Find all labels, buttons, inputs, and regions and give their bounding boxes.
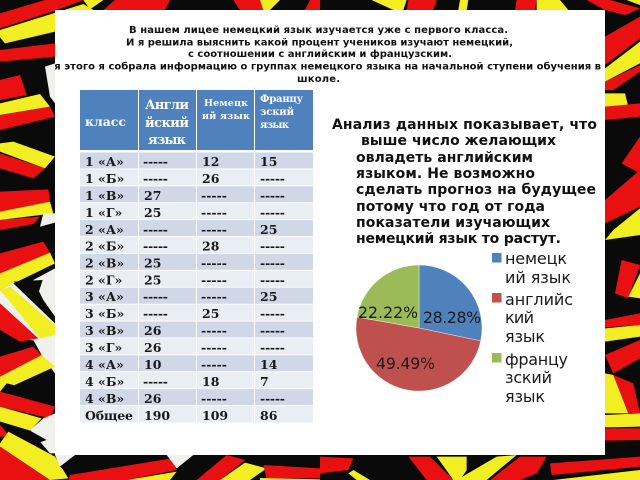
table row 3 «А»: 25 <box>260 289 277 304</box>
table header row <box>80 90 313 150</box>
panel: white content sheet <box>55 10 605 455</box>
table header row: класс <box>85 114 126 129</box>
pie slice: французский язык <box>357 265 419 328</box>
table row 1 «Г»: 1 «Г» <box>85 205 122 220</box>
title text block: Для этого я собрала информацию о группах немецкого языка на начальной ступени обучения в <box>38 60 601 72</box>
legend item: французский язык: язык <box>505 387 545 406</box>
table row 2 «В»: 25 <box>144 256 161 270</box>
table row 4 «А»: 14 <box>260 357 278 372</box>
table row 3 «Б»: ----- <box>143 306 168 321</box>
table row 3 «Г»: ----- <box>201 340 227 355</box>
table row 3 «Б»: 25 <box>202 306 219 321</box>
table row 2 «Б»: 28 <box>202 238 220 254</box>
table row 1 «Б»: 1 «Б» <box>85 171 124 186</box>
analysis text block: овладеть английским <box>356 150 533 166</box>
table row 1 «Б»: ----- <box>260 171 285 186</box>
table header row: Францу <box>260 94 304 105</box>
table row 1 «Г»: ----- <box>201 205 227 220</box>
table row 3 «В»: ----- <box>260 323 285 338</box>
table header row: язык <box>148 133 187 148</box>
table row 1 «Б» <box>80 169 313 186</box>
title text block: с соотношении с английским и французским. <box>188 48 452 60</box>
pie slice: английский язык <box>356 317 481 391</box>
table row 4 «А»: ----- <box>201 357 227 372</box>
table row 2 «А»: 25 <box>260 222 277 237</box>
pie label 49.49%: 49.49% <box>376 354 435 373</box>
pie label 22.22%: 22.22% <box>358 303 418 322</box>
table row 3 «Б»: 3 «Б» <box>85 306 124 321</box>
table row 4 «В»: 4 «В» <box>85 391 124 406</box>
analysis text block: языком. Не возможно <box>356 166 535 182</box>
pie chart: language shares <box>356 265 482 391</box>
table row 2 «А» <box>80 220 313 237</box>
table header row: Англи <box>145 98 189 113</box>
table row 4 «А»: 4 «А» <box>85 357 124 372</box>
table row 2 «Б»: 2 «Б» <box>85 238 124 254</box>
table row 3 «А»: 3 «А» <box>85 289 124 304</box>
table row 1 «Г»: ----- <box>260 205 285 220</box>
legend item: английский язык <box>492 290 573 346</box>
table row 1 «Г» <box>80 203 313 220</box>
table row 1 «А»: 15 <box>260 154 277 169</box>
table row 3 «Г»: 26 <box>144 340 162 355</box>
table row 3 «А» <box>80 288 313 304</box>
table header row: Немецк <box>204 98 248 109</box>
chart legend <box>492 249 573 406</box>
table row 2 «Г»: ----- <box>260 272 285 288</box>
table row 4 «В»: ----- <box>260 391 285 406</box>
table row 1 «В»: ----- <box>260 188 285 203</box>
analysis text block <box>332 117 597 247</box>
title text block: школе. <box>297 74 340 85</box>
legend item: английский язык: английс <box>505 290 573 309</box>
table row 2 «А»: ----- <box>143 222 168 237</box>
legend item: английский язык: кий <box>505 308 534 327</box>
legend item: французский язык: францу <box>505 350 568 369</box>
table row 4 «В»: 26 <box>144 391 162 406</box>
table row total: Общее <box>85 408 133 423</box>
table row 1 «В» <box>80 186 313 203</box>
table row 4 «В»: ----- <box>201 391 227 406</box>
table row 4 «А»: 10 <box>144 357 162 372</box>
table row total: 86 <box>260 408 278 423</box>
analysis text block: показатели изучающих <box>356 215 550 231</box>
table row 4 «Б»: ----- <box>143 374 168 389</box>
table row 4 «Б»: 4 «Б» <box>85 374 124 389</box>
table row 2 «В»: ----- <box>260 256 285 270</box>
table row 3 «А»: ----- <box>201 289 227 304</box>
table row 2 «В» <box>80 254 313 270</box>
table row 2 «В»: ----- <box>201 256 227 270</box>
legend item: французский язык <box>492 350 568 406</box>
table row 2 «А»: 2 «А» <box>85 222 124 237</box>
table row 2 «Б»: ----- <box>143 238 168 254</box>
table row 4 «Б» <box>80 372 313 389</box>
table row 3 «Г»: 3 «Г» <box>85 340 122 355</box>
table row 2 «Б»: ----- <box>260 238 285 254</box>
table row 4 «А» <box>80 355 313 372</box>
title text block: И я решила выяснить какой процент учеников изучают немецкий, <box>126 38 513 48</box>
analysis text block: сделать прогноз на будущее <box>356 182 596 198</box>
table row 1 «А»: 1 «А» <box>85 154 124 169</box>
table header row: зский <box>260 107 295 118</box>
table row 3 «В»: 26 <box>144 323 162 338</box>
table row 3 «В»: ----- <box>201 323 227 338</box>
table header row: йский <box>145 116 189 131</box>
table row 3 «В»: 3 «В» <box>85 323 124 338</box>
table row 4 «Б»: 18 <box>202 374 220 389</box>
legend item: немецкий язык: немецк <box>505 249 567 268</box>
table row 3 «Г» <box>80 338 313 355</box>
table row 1 «Б»: ----- <box>143 171 168 186</box>
legend item: немецкий язык: ий язык <box>505 268 571 287</box>
table row 1 «В»: 27 <box>144 188 161 203</box>
table row 2 «А»: ----- <box>201 222 227 237</box>
legend item: французский язык: зский <box>505 368 552 387</box>
table row 1 «В»: 1 «В» <box>85 188 124 203</box>
table row 1 «А»: 12 <box>202 154 219 169</box>
table row total: 190 <box>144 408 170 423</box>
legend item: английский язык: язык <box>505 327 545 346</box>
pie label 28.28%: 28.28% <box>423 308 481 327</box>
table: language groups by class <box>80 90 313 423</box>
table row 3 «Г»: ----- <box>260 340 285 355</box>
table row 2 «Г» <box>80 271 313 288</box>
analysis text block: потому что год от года <box>356 199 545 215</box>
table row total <box>80 406 313 423</box>
table row 3 «Б»: ----- <box>260 306 285 321</box>
table row 1 «В»: ----- <box>201 188 227 203</box>
table header row: ий язык <box>202 111 250 122</box>
table row 3 «Б» <box>80 305 313 321</box>
table row 4 «Б»: 7 <box>260 374 269 389</box>
table row 2 «Г»: ----- <box>201 272 227 288</box>
analysis text block: выше число желающих <box>361 133 556 149</box>
table header row: язык <box>260 120 290 131</box>
legend item: немецкий язык <box>492 249 571 287</box>
table row 1 «А» <box>80 152 313 169</box>
table row 2 «Г»: 25 <box>144 272 161 288</box>
table row 2 «Б» <box>80 237 313 254</box>
table row 2 «В»: 2 «В» <box>85 256 124 270</box>
table row 1 «Б»: 26 <box>202 171 220 186</box>
table row 3 «А»: ----- <box>143 289 168 304</box>
table row 1 «Г»: 25 <box>144 205 161 220</box>
table row 4 «В» <box>80 389 313 406</box>
table row 1 «А»: ----- <box>143 154 168 169</box>
analysis text block: немецкий язык то растут. <box>356 231 561 247</box>
pie slice: немецкий язык <box>419 265 482 341</box>
table row 2 «Г»: 2 «Г» <box>85 272 122 288</box>
table row 3 «В» <box>80 322 313 338</box>
title text block: В нашем лицее немецкий язык изучается уже с первого класса. <box>129 25 508 36</box>
table row total: 109 <box>202 408 228 423</box>
title text block <box>38 25 601 85</box>
analysis text block: Анализ данных показывает, что <box>332 117 597 133</box>
